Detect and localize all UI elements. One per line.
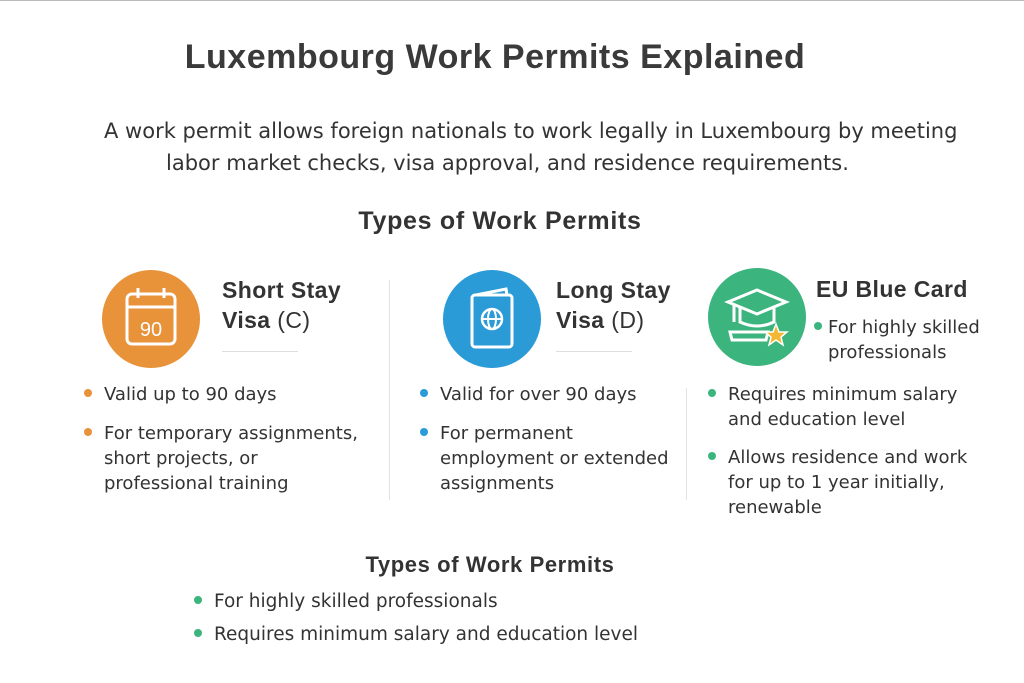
bullets: renewable: [728, 497, 822, 518]
bullets: Allows residence and work: [728, 447, 967, 468]
bottom bullets: For highly skilled professionals: [214, 591, 498, 612]
section heading: Types of Work Permits: [358, 207, 642, 235]
bullets: professional training: [104, 473, 289, 494]
bottom bullets: Requires minimum salary and education level: [214, 624, 638, 645]
panel: EU blue card: [708, 268, 980, 518]
panel: long stay: [420, 270, 671, 494]
bullets: For permanent: [440, 423, 573, 444]
title: Luxembourg Work Permits Explained: [185, 38, 805, 76]
intro text: [104, 119, 957, 175]
heading: [222, 277, 341, 333]
heading: Long Stay: [556, 277, 671, 303]
heading: [556, 277, 671, 333]
panel: short stay: [84, 270, 358, 494]
bullets: for up to 1 year initially,: [728, 472, 945, 493]
icon: graduation cap: [708, 268, 806, 366]
bullets: short projects, or: [104, 448, 258, 469]
heading: Visa (D): [556, 307, 644, 333]
bullets: For temporary assignments,: [104, 423, 358, 444]
heading: EU Blue Card: [816, 276, 968, 302]
icon: calendar: [102, 270, 200, 368]
heading: Short Stay: [222, 277, 341, 303]
heading: Visa (C): [222, 307, 310, 333]
panel: EU blue card: professionals: [828, 342, 946, 363]
bullets: [708, 384, 968, 518]
bullets: assignments: [440, 473, 554, 494]
panel: EU blue card: For highly skilled: [828, 317, 980, 338]
intro text: A work permit allows foreign nationals to work legally in Luxembourg by meeting: [104, 119, 957, 143]
icon: passport: [443, 270, 541, 368]
bottom heading: Types of Work Permits: [366, 552, 614, 577]
bullets: Valid for over 90 days: [440, 384, 637, 405]
bullets: Requires minimum salary: [728, 384, 957, 405]
bullets: employment or extended: [440, 448, 669, 469]
bottom bullets: [194, 591, 638, 645]
intro text: labor market checks, visa approval, and residence requirements.: [166, 151, 849, 175]
bullets: and education level: [728, 409, 905, 430]
icon: calendar: 90: [140, 319, 162, 341]
bullets: [420, 384, 669, 494]
bullets: Valid up to 90 days: [104, 384, 277, 405]
bullets: [84, 384, 358, 494]
